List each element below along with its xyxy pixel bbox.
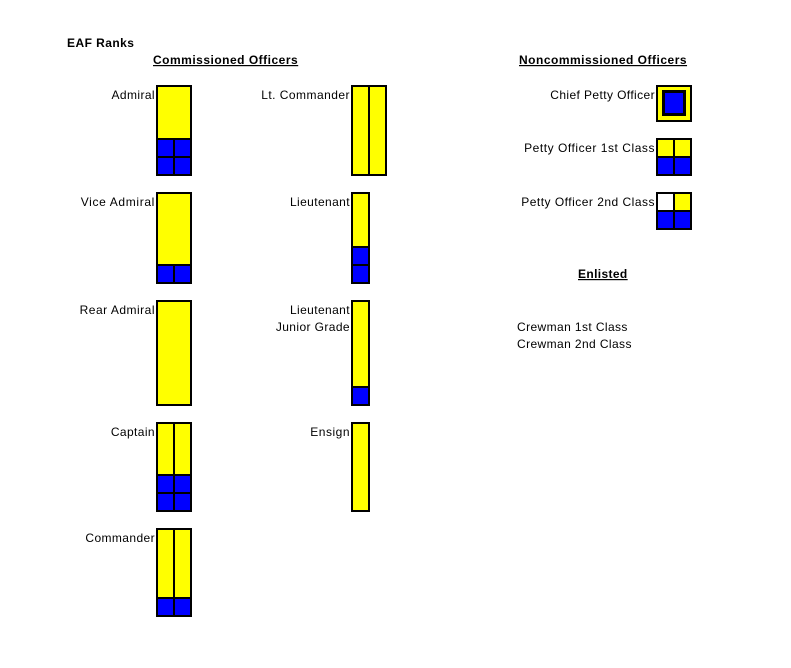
heading: commissioned officers: Commissioned Officers	[153, 53, 298, 67]
rank: petty officer 1st class	[524, 138, 692, 176]
rank: chief petty officer	[550, 85, 692, 122]
rank: commander	[85, 528, 192, 617]
rank: petty officer 2nd class	[521, 192, 692, 230]
rank: ensign: Ensign	[310, 425, 350, 439]
title: EAF Ranks	[67, 36, 134, 50]
heading: noncommissioned officers: Noncommissioned Officers	[519, 53, 687, 67]
rank: captain: Captain	[111, 425, 155, 439]
rank: commander: Commander	[85, 531, 155, 545]
rank: lt. commander	[261, 85, 387, 176]
rank: lieutenant junior grade: Junior Grade	[276, 320, 350, 334]
rank: petty officer 2nd class: Petty Officer 2nd Class	[521, 195, 655, 209]
rank: chief petty officer: Chief Petty Officer	[550, 88, 655, 102]
rank: vice admiral	[81, 192, 192, 284]
rank: lieutenant: Lieutenant	[290, 195, 350, 209]
rank: petty officer 1st class: Petty Officer 1st Class	[524, 141, 655, 155]
text: crewman 1st class: Crewman 1st Class	[517, 320, 628, 334]
heading: enlisted: Enlisted	[578, 267, 628, 281]
rank: vice admiral: Vice Admiral	[81, 195, 155, 209]
rank: admiral	[112, 85, 192, 176]
rank: rear admiral: Rear Admiral	[80, 303, 155, 317]
rank: lt. commander: Lt. Commander	[261, 88, 350, 102]
rank: lieutenant junior grade	[276, 300, 370, 406]
rank: lieutenant junior grade: Lieutenant	[290, 303, 350, 317]
text: crewman 2nd class: Crewman 2nd Class	[517, 337, 632, 351]
rank: captain	[111, 422, 192, 512]
rank: admiral: Admiral	[112, 88, 155, 102]
rank: ensign	[310, 422, 370, 512]
rank: lieutenant	[290, 192, 370, 284]
rank: rear admiral	[80, 300, 192, 406]
